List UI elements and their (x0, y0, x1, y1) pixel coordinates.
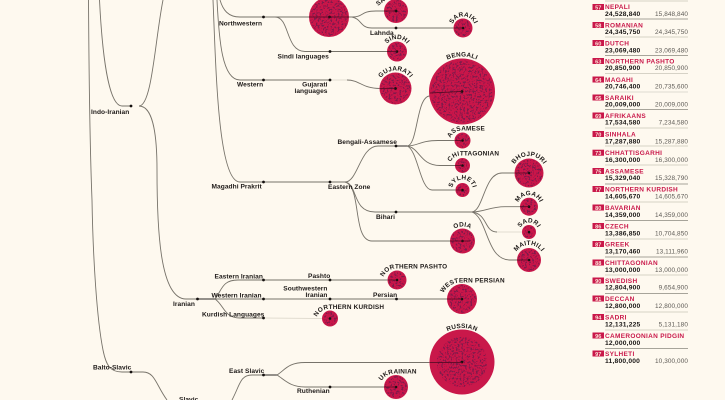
row: Chhattisgarhi: 73 (595, 151, 601, 157)
row: Czech: CZECH (605, 223, 629, 230)
row: Chittagonian: 88 (595, 261, 601, 267)
branch labels: Western (237, 82, 263, 88)
bubble: Bengali: BENGALI (446, 52, 478, 60)
row: Dutch: 23,069,480 (605, 48, 641, 54)
row: Saraiki (592, 94, 688, 108)
row: Chittagonian (592, 260, 688, 274)
row: Sadri: SADRI (605, 314, 627, 321)
row: Nepali: 15,848,840 (655, 11, 688, 18)
bubble: Odia (450, 222, 475, 254)
branch labels: Sindi languages (278, 54, 329, 60)
row: Dutch (592, 40, 688, 54)
row: Deccan: 12,800,000 (655, 303, 688, 310)
bubble: Russian (430, 324, 494, 394)
row: Northern Kurdish: NORTHERN KURDISH (605, 186, 678, 194)
row: Deccan (592, 296, 688, 310)
bubble: Assamese: ASSAMESE (448, 126, 484, 138)
row: Greek: 13,111,960 (656, 248, 688, 256)
row: Chittagonian: 13,000,000 (655, 267, 688, 274)
row: Bavarian (592, 204, 688, 219)
row: Afrikaans (592, 112, 688, 126)
bubble: Russian: RUSSIAN (446, 324, 478, 332)
branch labels: Iranian (306, 292, 328, 299)
connector ends inside bubbles (309, 11, 529, 387)
row: Dutch: 60 (595, 41, 601, 47)
bubble: Northern Pashto (380, 264, 447, 290)
row: Nepali: 24,528,840 (605, 11, 641, 18)
row: Sylheti: SYLHETI (605, 351, 635, 358)
bubble: Chittagonian: CHITTAGONIAN (448, 151, 499, 161)
row: Assamese: 15,328,790 (655, 175, 688, 182)
row: Romanian: ROMANIAN (605, 22, 643, 29)
row: Nepali: 57 (595, 5, 601, 11)
row: Cameroonian Pidgin: 12,000,000 (605, 340, 641, 347)
row: Cameroonian Pidgin: CAMEROONIAN PIDGIN (605, 333, 684, 340)
row: Greek (592, 241, 688, 256)
row: Saraiki: 20,009,000 (655, 102, 688, 108)
branch labels: languages (294, 88, 328, 95)
row: Saraiki: 20,009,000 (605, 102, 641, 108)
row: Magahi: 64 (595, 78, 602, 84)
bubble: Maithili (513, 240, 545, 272)
row: Sinhala: 17,287,880 (605, 138, 641, 145)
row: Assamese (592, 168, 688, 182)
row: Czech: 86 (595, 224, 601, 230)
branch labels: Kurdish Languages (202, 312, 265, 318)
row: Sinhala: 70 (595, 132, 601, 138)
row: Sylheti: 10,300,000 (655, 358, 688, 365)
branch labels: Ruthenian (297, 388, 330, 395)
branch labels: Balto-Slavic (93, 364, 132, 372)
row: Northern Kurdish: 77 (595, 187, 601, 193)
row: Saraiki: SARAIKI (605, 95, 634, 102)
node dots (130, 16, 398, 388)
row: Greek: 13,170,460 (605, 248, 641, 256)
row: Bavarian: 14,359,000 (605, 212, 641, 219)
row: Northern Pashto: 20,850,900 (605, 65, 641, 72)
branch labels: Bihari (376, 214, 395, 221)
bubble: Gujarati: GUJARATI (378, 66, 414, 78)
branch labels: Iranian (173, 301, 195, 308)
row: Magahi: 20,735,600 (655, 84, 688, 90)
bubble: Magahi (514, 190, 544, 216)
row: Czech: 13,386,850 (605, 230, 641, 238)
branch labels: Indo-Iranian (91, 109, 129, 116)
row: Northern Pashto (592, 58, 688, 72)
branch labels: Gujarati (302, 82, 328, 88)
row: Northern Pashto: 20,850,900 (655, 65, 688, 72)
row: Assamese: 75 (595, 169, 601, 175)
row: Bavarian: BAVARIAN (605, 205, 641, 212)
language tree connectors (88, 0, 529, 400)
row: Magahi: 20,746,400 (605, 84, 641, 90)
row: Afrikaans: 17,534,580 (605, 120, 641, 126)
row: Northern Pashto: NORTHERN PASHTO (605, 58, 675, 66)
bubble: Western Persian (440, 278, 504, 314)
branch labels: Magadhi Prakrit (212, 184, 262, 190)
row: Bavarian: 80 (595, 206, 601, 212)
row: Swedish (592, 278, 688, 292)
row: Swedish: 12,804,900 (605, 284, 641, 292)
row: Afrikaans: 7,234,580 (659, 120, 688, 126)
row: Chhattisgarhi: 16,300,000 (605, 157, 641, 164)
branch labels: Bengali-Assamese (338, 139, 397, 146)
row: Deccan: 12,800,000 (605, 303, 641, 310)
row: Chittagonian: CHITTAGONIAN (605, 260, 658, 267)
bubble: Gujarati (378, 66, 414, 104)
row: Cameroonian Pidgin (592, 332, 684, 347)
branch labels: Eastern Zone (328, 184, 371, 191)
row: Romanian: 24,345,750 (605, 29, 641, 36)
bubble: Northern Kurdish: NORTHERN KURDISH (313, 304, 384, 316)
row: Romanian (592, 22, 688, 36)
row: Northern Kurdish: 14,605,670 (655, 194, 688, 200)
bubble: Bhojpuri (511, 152, 547, 188)
bubble: Northern Pashto: NORTHERN PASHTO (380, 264, 447, 276)
row: Northern Kurdish (592, 186, 688, 200)
row: Swedish: SWEDISH (605, 278, 637, 285)
bubble: second top language (376, 0, 408, 23)
row: Assamese: 15,329,040 (605, 175, 641, 182)
branch labels: Northwestern (219, 20, 262, 28)
row: Sadri: 5,131,180 (659, 322, 688, 328)
bubble: Western Persian: WESTERN PERSIAN (440, 278, 504, 292)
bubble: Sylheti (448, 174, 477, 197)
row: Sylheti: 97 (595, 352, 601, 358)
table rules (605, 1, 688, 348)
bubble: Saraiki (449, 12, 478, 38)
bubble: Northern Kurdish (313, 304, 384, 326)
bubble: Sylheti: SYLHETI (448, 174, 477, 188)
row: Northern Pashto: 63 (595, 59, 601, 65)
row: Czech (592, 223, 688, 238)
bubble: Bhojpuri: BHOJPURI (511, 152, 547, 164)
row: Afrikaans: 69 (595, 114, 601, 120)
row: Swedish: 90 (595, 279, 601, 285)
branch labels (91, 20, 397, 400)
bubble: Sadri: SADRI (518, 218, 541, 228)
row: Romanian: 24,345,750 (655, 29, 688, 36)
bubble: Sindhi: SINDHI (384, 34, 410, 44)
row: Saraiki: 65 (595, 96, 601, 102)
row: Chhattisgarhi (592, 150, 688, 164)
bubble: top-left language (309, 0, 349, 37)
row: Sinhala: 15,287,880 (655, 138, 688, 145)
branch labels: Persian (373, 292, 397, 299)
row: Bavarian: 14,359,000 (655, 212, 688, 219)
branch labels: Lahnda (370, 30, 394, 37)
row: Cameroonian Pidgin: 96 (595, 334, 601, 340)
row: Afrikaans: AFRIKAANS (605, 113, 646, 120)
bubble: Bengali (429, 52, 495, 124)
row: Nepali: NEPALI (605, 4, 630, 11)
row: Magahi (592, 76, 688, 90)
branch labels: Eastern Iranian (214, 274, 263, 280)
row: Romanian: 58 (595, 23, 601, 29)
row: Nepali (592, 4, 688, 18)
bubble: Magahi: MAGAHI (514, 190, 544, 202)
branch labels: East Slavic (229, 368, 265, 375)
row: Magahi: MAGAHI (605, 77, 633, 84)
bubble: Ukrainian: UKRAINIAN (378, 369, 416, 380)
row: Deccan: 91 (595, 297, 601, 303)
row: Greek: 87 (595, 242, 601, 248)
row: Sadri: 12,131,225 (605, 322, 641, 328)
row: Chittagonian: 13,000,000 (605, 267, 641, 274)
bubble: Sadri (518, 218, 541, 239)
bubble: Maithili: MAITHILI (513, 240, 545, 252)
bubble: Chittagonian (448, 151, 499, 173)
row: Sylheti: 11,800,000 (605, 358, 640, 365)
row: Northern Kurdish: 14,605,670 (605, 194, 641, 200)
branch labels: Pashto (308, 273, 330, 280)
row: Deccan: DECCAN (605, 296, 635, 303)
bubble: Saraiki: SARAIKI (449, 12, 478, 24)
row: Dutch: DUTCH (605, 40, 629, 48)
branch labels: Western Iranian (212, 292, 262, 300)
branch labels: Southwestern (283, 286, 328, 292)
row: Sinhala (592, 131, 688, 145)
bubble: Odia: ODIA (454, 222, 470, 228)
row: Czech: 10,704,850 (655, 230, 688, 238)
row: Dutch: 23,069,480 (655, 48, 688, 54)
row: Greek: GREEK (605, 242, 630, 248)
row: Chhattisgarhi: 16,300,000 (655, 157, 688, 164)
row: Sylheti (592, 350, 688, 365)
bubble: Ukrainian (378, 369, 416, 399)
row: Sadri (592, 314, 688, 328)
panel: ranked language table (592, 1, 688, 365)
row: Sinhala: SINHALA (605, 131, 636, 138)
bubble: Sindhi (384, 34, 410, 62)
row: Assamese: ASSAMESE (605, 168, 644, 175)
row: Sadri: 94 (595, 315, 602, 321)
row: Swedish: 9,654,900 (659, 284, 688, 292)
row: Chhattisgarhi: CHHATTISGARHI (605, 150, 662, 157)
bubble: Assamese (448, 126, 484, 148)
